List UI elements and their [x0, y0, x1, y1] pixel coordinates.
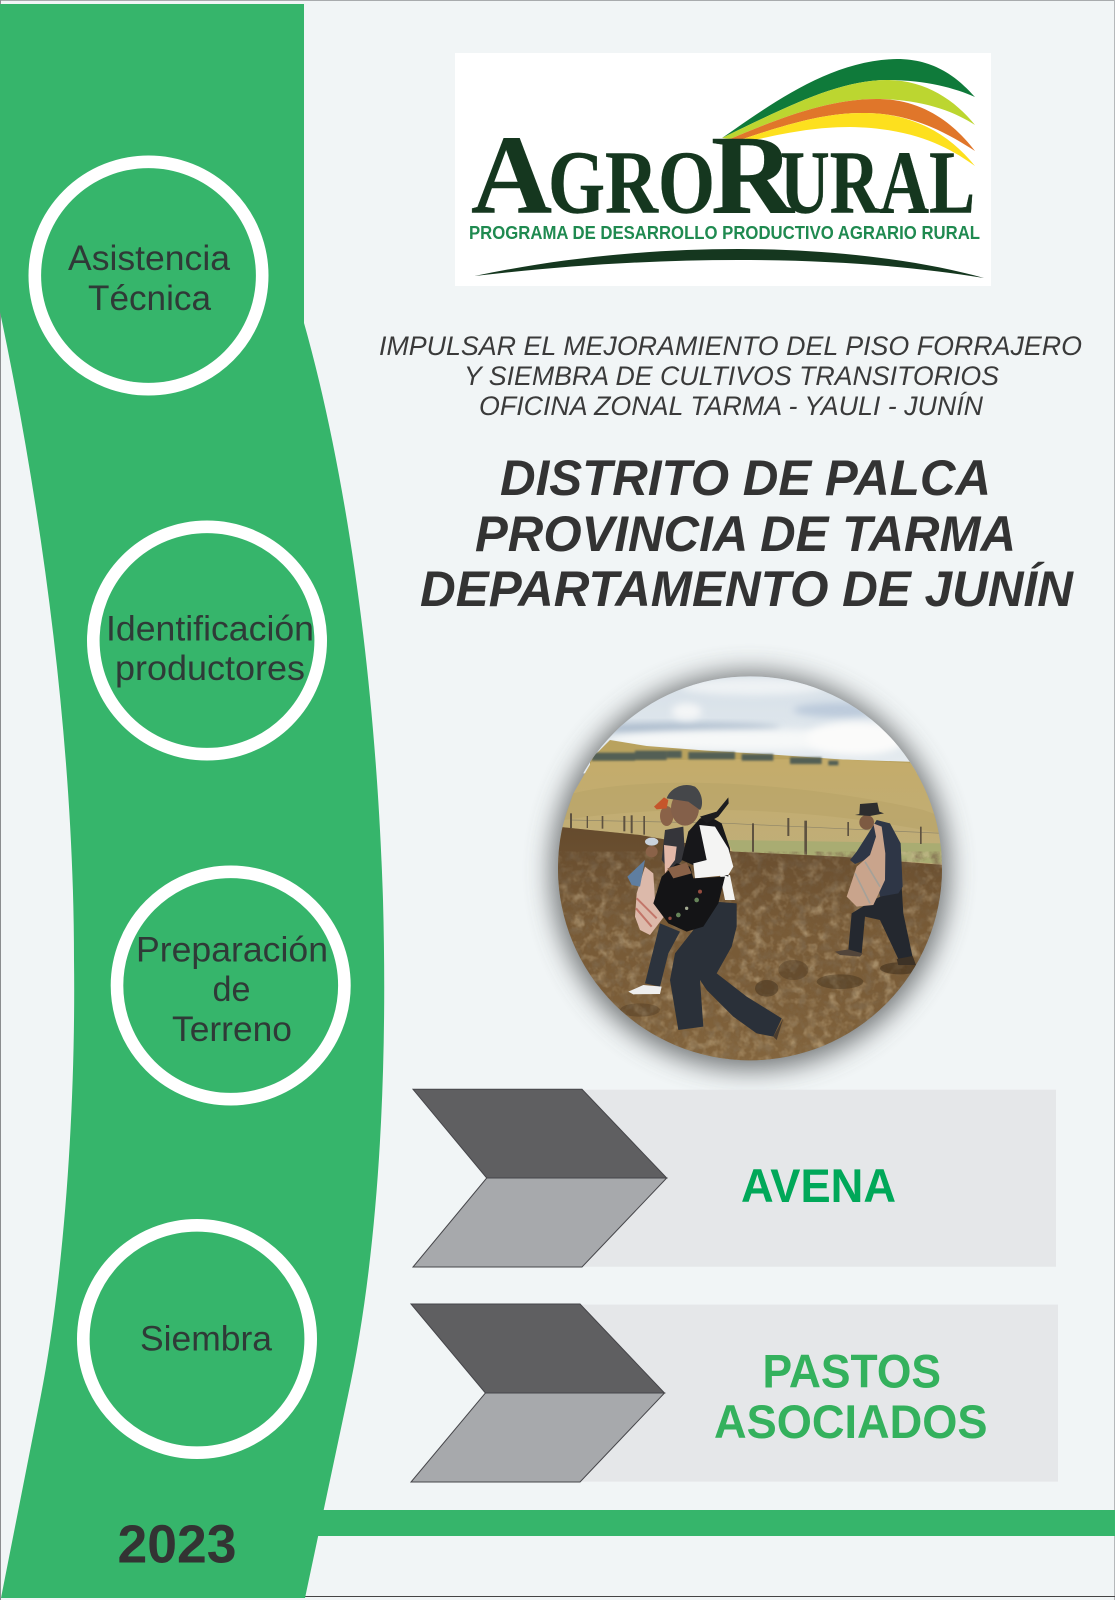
label: AVENA: [741, 1159, 896, 1212]
logo wordmark: URAL: [780, 134, 975, 232]
step: Siembra: Siembra: [140, 1319, 272, 1359]
logo wordmark: [471, 114, 975, 238]
sky: [583, 676, 917, 774]
chevron arrow: [413, 1089, 667, 1267]
label: ASOCIADOS: [714, 1395, 988, 1448]
panel: [580, 1305, 1058, 1482]
photo shadow: [551, 672, 949, 1070]
logo: AgroRural: [455, 53, 991, 286]
step: Asistencia Técnica: [35, 162, 262, 389]
subtitle: Y SIEMBRA DE CULTIVOS TRANSITORIOS: [464, 361, 999, 391]
crop band: pastos asociados: [411, 1304, 1058, 1482]
step: Preparación de Terreno: Preparación: [136, 930, 328, 970]
tree line: [592, 751, 838, 765]
logo swoosh: [474, 249, 984, 278]
logo wordmark: A: [471, 114, 552, 238]
panel: [582, 1090, 1056, 1267]
label: [714, 1345, 988, 1448]
green strip and fence: [570, 813, 942, 864]
main heading: DEPARTAMENTO DE JUNÍN: [420, 561, 1074, 617]
step: Identificación productores: [93, 527, 321, 754]
footer green bar: [315, 1510, 1115, 1536]
main heading: [420, 450, 1074, 617]
crop band: avena: [413, 1089, 1056, 1267]
step: Asistencia Técnica: Técnica: [88, 278, 211, 318]
year: 2023: [118, 1515, 236, 1575]
step: Preparación de Terreno: [117, 872, 344, 1099]
step: Asistencia Técnica: Asistencia: [68, 238, 230, 278]
ploughed soil: [557, 827, 943, 1063]
logo wordmark: R: [711, 114, 795, 238]
chevron arrow: [411, 1304, 664, 1482]
farmer in the back: [627, 797, 685, 994]
step: Preparación de Terreno: de: [212, 969, 250, 1009]
label: PASTOS: [762, 1345, 941, 1398]
main heading: DISTRITO DE PALCA: [500, 450, 991, 506]
subtitle: IMPULSAR EL MEJORAMIENTO DEL PISO FORRAJERO: [379, 331, 1082, 361]
step: Identificación productores: productores: [115, 648, 305, 688]
main heading: PROVINCIA DE TARMA: [475, 506, 1016, 562]
green curved ribbon: [0, 4, 384, 1598]
step: Siembra: [83, 1225, 311, 1453]
hills: [560, 740, 942, 873]
step: Identificación productores: Identificación: [106, 608, 314, 648]
photo: farmers sowing in a ploughed field: [558, 676, 942, 1060]
farmer on the right: [835, 803, 916, 965]
subtitle: [379, 331, 1082, 421]
logo wordmark: GRO: [548, 134, 715, 232]
logo arcs: [722, 59, 975, 166]
logo tagline: PROGRAMA DE DESARROLLO PRODUCTIVO AGRARIO RURAL: [469, 222, 980, 243]
step: Preparación de Terreno: Terreno: [172, 1009, 292, 1049]
subtitle: OFICINA ZONAL TARMA - YAULI - JUNÍN: [479, 391, 983, 421]
farmer in the front: [653, 785, 783, 1040]
